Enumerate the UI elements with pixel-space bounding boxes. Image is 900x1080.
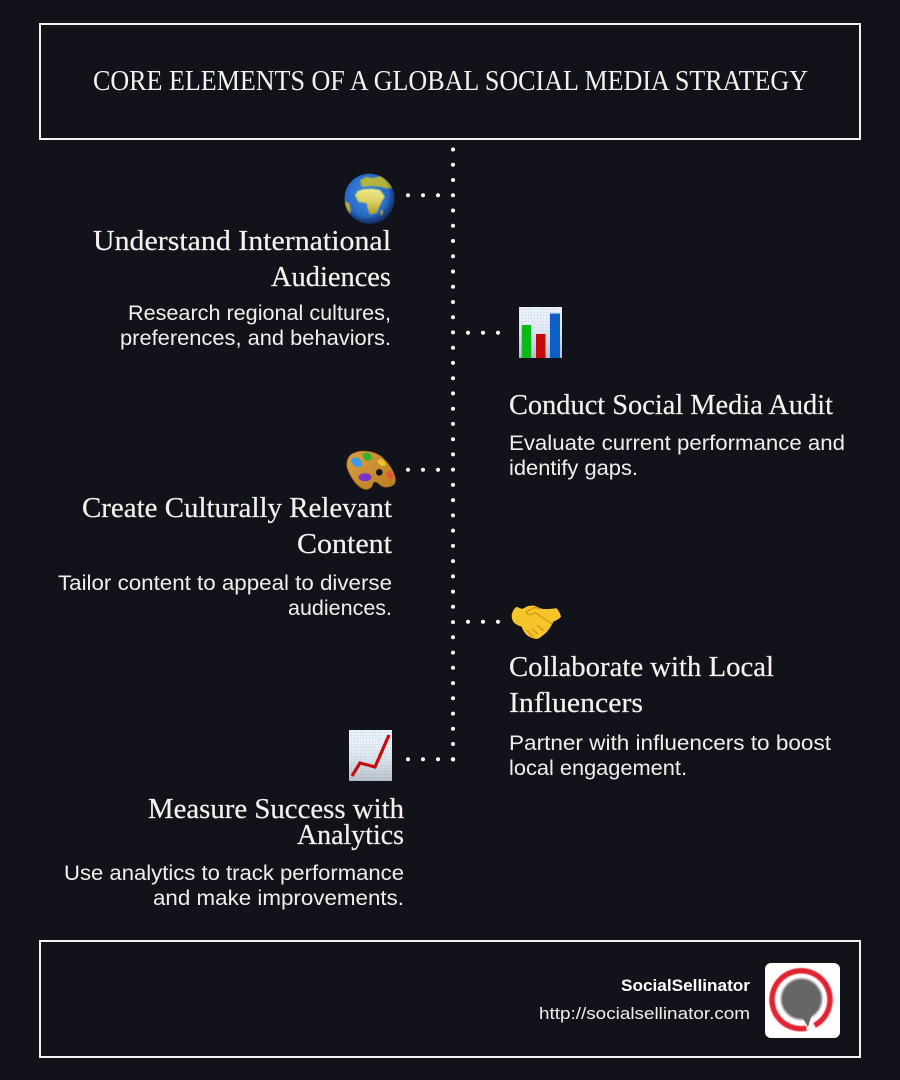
logo — [765, 963, 840, 1038]
step 2: conduct social media audit: identify gaps. — [509, 457, 638, 480]
website url: http://socialsellinator.com — [539, 1005, 750, 1023]
step 4: collaborate with local influencers: Influencers — [509, 688, 643, 719]
step 1: understand international audiences — [93, 174, 394, 350]
step 1: understand international audiences: Audiences — [271, 262, 391, 293]
heading: Understand International — [93, 226, 391, 257]
step 4: collaborate with local influencers — [509, 606, 831, 780]
description: Research regional cultures, — [128, 302, 391, 325]
icon: line chart — [349, 730, 392, 781]
step 3: create culturally relevant content — [58, 451, 395, 620]
description: Use analytics to track performance — [64, 862, 404, 885]
icon: handshake — [512, 606, 561, 639]
step 1: understand international audiences: preferences, and behaviors. — [120, 327, 391, 350]
step 3: create culturally relevant content: audiences. — [288, 597, 392, 620]
heading: Collaborate with Local — [509, 652, 774, 683]
description: Evaluate current performance and — [509, 432, 845, 455]
footer panel — [40, 941, 860, 1057]
icon: palette — [347, 451, 395, 489]
heading: Create Culturally Relevant — [82, 493, 392, 524]
step 5: measure success with analytics: Analytics — [297, 820, 404, 851]
step 3: create culturally relevant content: Content — [297, 529, 392, 560]
step 2: conduct social media audit — [509, 307, 845, 480]
description: Tailor content to appeal to diverse — [58, 572, 392, 595]
brand name: SocialSellinator — [621, 977, 751, 995]
step 5: measure success with analytics: and make improvements. — [153, 887, 404, 910]
icon: globe — [344, 174, 394, 224]
dotted timeline — [406, 148, 500, 762]
icon: bar chart — [519, 307, 562, 358]
heading: Measure Success with — [148, 794, 404, 825]
title: CORE ELEMENTS OF A GLOBAL SOCIAL MEDIA STRATEGY — [93, 65, 808, 97]
step 5: measure success with analytics — [64, 730, 404, 910]
step 4: collaborate with local influencers: local engagement. — [509, 757, 687, 780]
description: Partner with influencers to boost — [509, 732, 831, 755]
heading: Conduct Social Media Audit — [509, 390, 833, 421]
title panel — [40, 24, 860, 139]
